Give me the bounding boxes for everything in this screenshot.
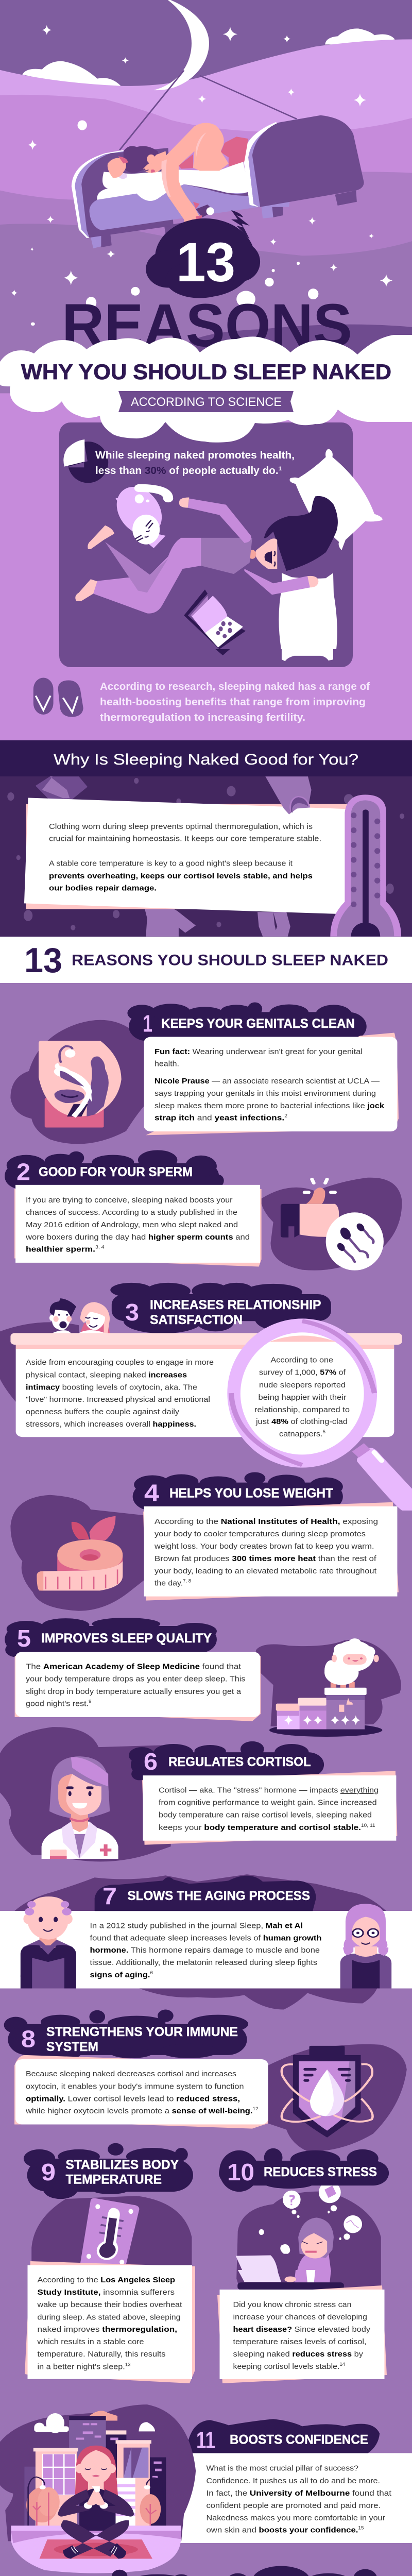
reason 8: strengthens your immune system: STRENGTHENS YOUR IMMUNE — [46, 2025, 238, 2039]
illustration: old man — [21, 1896, 76, 1977]
reason 5: improves sleep quality: The American Academy of Sleep Medicine found that — [26, 1663, 242, 1671]
text card — [142, 1771, 397, 1845]
note text: crucial for maintaining homeostasis. It keeps our core temperature stable. — [49, 835, 321, 843]
reason 8: strengthens your immune system: oxytocin, it enables your body's immune system to function — [26, 2082, 244, 2091]
pie chart icon — [63, 439, 108, 483]
illustration: doctor — [0, 1727, 171, 1861]
backing blob — [14, 1874, 386, 1911]
reason 1: keeps your genitals clean — [10, 1002, 399, 1144]
reason 10: reduces stress: sleeping naked reduces stress by — [233, 2350, 364, 2359]
reason 6: regulates cortisol: body temperature can raise cortisol levels, sleeping naked — [159, 1811, 372, 1820]
panel bottom: book tip and pillow — [215, 649, 333, 661]
title line: why you should sleep naked: WHY YOU SHOULD SLEEP NAKED — [21, 360, 391, 384]
title word: REASONS: REASONS — [62, 292, 352, 360]
reason 3: increases relationship satisfaction: stressors, which increases overall happiness. — [26, 1420, 196, 1429]
hanging bed illustration — [72, 71, 364, 248]
reason 7: slows the aging process: tissue. Additionally, the melatonin released during sleep fights — [90, 1958, 317, 1967]
reason 1: keeps your genitals clean: 2 — [284, 1113, 287, 1118]
note text: Clothing worn during sleep prevents optimal thermoregulation, which is — [49, 822, 313, 831]
note text — [49, 822, 321, 892]
heading: 13 reasons you should sleep naked — [0, 937, 412, 983]
text card — [25, 2261, 195, 2383]
reason 12: lets your skin breathe — [111, 2570, 187, 2576]
reason 6: regulates cortisol: 10, 11 — [361, 1823, 375, 1828]
text card — [14, 1185, 262, 1267]
reason 3: increases relationship satisfaction: catnappers. — [279, 1430, 319, 1438]
reason 5: improves sleep quality: 9 — [89, 1699, 92, 1704]
text card — [143, 1502, 399, 1601]
reason 10: reduces stress: 14 — [339, 2362, 345, 2367]
reason 5: improves sleep quality: your body temperature drops as you enter deep sleep. This — [26, 1675, 245, 1684]
note text: prevents overheating, keeps our cortisol levels stable, and helps — [49, 872, 313, 880]
note card — [24, 776, 349, 914]
note text: A stable core temperature is key to a good night's sleep because it — [49, 859, 293, 868]
reason 3: increases relationship satisfaction: Aside from encouraging couples to engage in more — [26, 1358, 214, 1367]
heading cloud — [227, 2566, 382, 2576]
reason 10: reduces stress: temperature raises levels of cortisol, — [233, 2337, 367, 2346]
number 13 on dark cloud — [146, 218, 260, 298]
reason 13: promotes healthy hair and skin — [218, 2566, 389, 2576]
reason 1: keeps your genitals clean: sleep makes them more prone to bacterial infections like jock — [154, 1101, 385, 1110]
reason 3: increases relationship satisfaction: "love" hormone. Increased physical and emotional — [26, 1395, 210, 1404]
reason 6: regulates cortisol: REGULATES CORTISOL — [168, 1755, 311, 1769]
reason 4: helps you lose weight: 4 — [144, 1480, 159, 1506]
heading band: why is sleeping naked good for you: Why Is Sleeping Naked Good for You? — [54, 751, 358, 768]
reason 4: helps you lose weight: weight loss. Your body creates brown fat to keep you warm. — [154, 1542, 374, 1551]
illustration: thermometer card — [31, 2196, 192, 2270]
reason 2: good for your sperm: 2 — [16, 1159, 30, 1185]
reason 7: slows the aging process — [0, 1874, 412, 2010]
reason 5: improves sleep quality: slight drop in body temperature actually ensures you get a — [26, 1687, 242, 1696]
reason 4: helps you lose weight: the day. — [154, 1579, 181, 1588]
text card — [14, 2055, 268, 2129]
reason 9: stabilizes body temperature: According to the Los Angeles Sleep — [37, 2276, 175, 2284]
reason 10: reduces stress: REDUCES STRESS — [264, 2165, 377, 2179]
reason 9: stabilizes body temperature: temperature. Naturally, this results — [37, 2350, 166, 2359]
icon: slippers — [33, 677, 84, 718]
reason 7: slows the aging process: signs of aging. — [90, 1971, 150, 1979]
reason 3: increases relationship satisfaction: According to one — [271, 1356, 333, 1365]
intro statistic text: 1 — [279, 466, 282, 472]
heading cloud — [133, 1472, 343, 1511]
reason 3: increases relationship satisfaction: intimacy boosting levels of oxytocin, aka. The — [26, 1383, 197, 1392]
reason 4: helps you lose weight: your body to cooler temperatures during sleep promotes — [154, 1530, 366, 1538]
reason 1: keeps your genitals clean: says trapping your genitals in this moist environment during — [154, 1089, 376, 1098]
text: In a 2012 study published in the journal Sleep, Mah et Al — [90, 1922, 303, 1930]
reason 5: improves sleep quality: good night's rest. — [26, 1699, 84, 1708]
reason 9: stabilizes body temperature: which results in a stable core — [37, 2337, 144, 2346]
reason 9: stabilizes body temperature: during sleep. As stated above, sleeping — [37, 2313, 180, 2321]
illustration: meditating woman and city — [0, 2404, 196, 2573]
intro statistic text — [95, 450, 295, 477]
text: What is the most crucial pillar of success? — [206, 2464, 358, 2473]
panel: clothing and thermoregulation — [0, 776, 412, 937]
reason 10: reduces stress: keeping cortisol levels stable. — [233, 2362, 334, 2371]
heading cloud — [4, 2010, 248, 2061]
reason 11: boosts confidence: confident people are promoted and paid more. — [206, 2501, 381, 2510]
magnifying glass callout — [227, 1318, 412, 1511]
reason 3: increases relationship satisfaction — [0, 1283, 412, 1511]
reason 11: boosts confidence: 11 — [196, 2427, 215, 2453]
reason 8: strengthens your immune system — [4, 2010, 407, 2151]
text card — [15, 1652, 261, 1721]
reason 8: strengthens your immune system: SYSTEM — [46, 2040, 98, 2054]
reason 1: keeps your genitals clean: strap itch and yeast infections. — [154, 1114, 275, 1122]
white band — [175, 2453, 412, 2543]
reason 3: increases relationship satisfaction: being happier with their — [259, 1393, 346, 1402]
illustration: pelvis — [10, 1020, 147, 1144]
reason 8: strengthens your immune system: 12 — [252, 2106, 258, 2111]
reason 9: stabilizes body temperature: naked improves thermoregulation, — [37, 2325, 177, 2334]
reason 3: increases relationship satisfaction: physical contact, sleeping naked increases — [26, 1370, 187, 1380]
illustration: old woman — [344, 1904, 387, 1947]
intro paragraph — [100, 681, 370, 723]
reason 2: good for your sperm: chances of success. According to a study published in the — [26, 1208, 237, 1217]
reason 11: boosts confidence — [0, 2404, 412, 2573]
heading cloud — [24, 2143, 193, 2199]
reason 2: good for your sperm — [5, 1150, 402, 1270]
heading cloud — [28, 2570, 191, 2576]
reason 3: increases relationship satisfaction: 5 — [323, 1429, 325, 1434]
reason 6: regulates cortisol: 6 — [144, 1748, 158, 1775]
white title cloud — [0, 335, 412, 443]
reason 10: reduces stress: 10 — [227, 2159, 254, 2185]
illustration: shield — [268, 2044, 407, 2151]
reason 1: keeps your genitals clean: health. — [154, 1060, 179, 1069]
reason 5: improves sleep quality: IMPROVES SLEEP QUALITY — [41, 1631, 212, 1646]
reason 6: regulates cortisol: from cognitive performance to weight gain. Since increased — [159, 1799, 377, 1807]
reason 8: strengthens your immune system: Because sleeping naked decreases cortisol and increases — [26, 2070, 236, 2078]
reason 6: regulates cortisol — [0, 1727, 397, 1861]
reason 3: increases relationship satisfaction: INCREASES RELATIONSHIP — [150, 1298, 321, 1312]
note text: our bodies repair damage. — [49, 884, 157, 892]
heading cloud — [219, 2148, 389, 2192]
illustration: sleeping woman in pajamas — [75, 449, 383, 649]
heading cloud — [5, 1150, 224, 1189]
reason 8: strengthens your immune system: 8 — [21, 2026, 36, 2053]
illustration: stressed woman at laptop — [236, 2181, 381, 2312]
reason 4: helps you lose weight: HELPS YOU LOSE WEIGHT — [169, 1486, 333, 1500]
reason 6: regulates cortisol: keeps your body temperature and cortisol stable. — [159, 1823, 342, 1832]
heading cloud — [110, 1283, 331, 1333]
stars and dots — [11, 25, 392, 326]
heading cloud — [5, 1618, 217, 1657]
reason 2: good for your sperm: If you are trying to conceive, sleeping naked boosts your — [26, 1196, 233, 1205]
banner: according to science: ACCORDING TO SCIENCE — [131, 395, 282, 409]
reason 2: good for your sperm: May 2016 edition of Andrology, men who slept naked and — [26, 1221, 238, 1229]
reason 11: boosts confidence: Nakedness makes you more comfortable in your — [206, 2514, 385, 2522]
reason 9: stabilizes body temperature: 9 — [41, 2159, 56, 2185]
reason 3: increases relationship satisfaction: relationship, compared to — [254, 1405, 350, 1414]
reason 7: slows the aging process: SLOWS THE AGING PROCESS — [128, 1889, 310, 1903]
reason 6: regulates cortisol: Cortisol — aka. The "stress" hormone — impacts everything — [159, 1786, 379, 1795]
text card — [217, 2285, 387, 2383]
intro paragraph: health-boosting benefits that range from improving — [100, 697, 366, 708]
heading cloud — [186, 2419, 380, 2453]
reason 1: keeps your genitals clean: 1 — [143, 1010, 152, 1037]
reason 2: good for your sperm: GOOD FOR YOUR SPERM — [39, 1165, 193, 1179]
reason 7: slows the aging process: 6 — [150, 1970, 153, 1975]
reason 3: increases relationship satisfaction: openness buffers the couple against daily — [26, 1408, 180, 1416]
heading cloud — [129, 1741, 324, 1780]
white band — [0, 1911, 412, 1989]
reason 7: slows the aging process: 7 — [102, 1883, 117, 1909]
reason 2: good for your sperm: 3, 4 — [95, 1245, 104, 1250]
heading: 13 reasons you should sleep naked: REASONS YOU SHOULD SLEEP NAKED — [72, 952, 388, 969]
reason 1: keeps your genitals clean: KEEPS YOUR GENITALS CLEAN — [161, 1016, 355, 1031]
reason 4: helps you lose weight: your body, leading to an elevated metabolic rate throughout — [154, 1567, 377, 1575]
intro statistic text: While sleeping naked promotes health, — [95, 450, 295, 461]
reason 4: helps you lose weight — [10, 1472, 399, 1611]
reason 3: increases relationship satisfaction: survey of 1,000, 57% of — [259, 1368, 346, 1377]
reason 2: good for your sperm: healthier sperm. — [26, 1245, 95, 1254]
reason 9: stabilizes body temperature: TEMPERATURE — [66, 2172, 162, 2187]
intro statistic text: less than 30% of people actually do. — [95, 465, 274, 477]
reason 3: increases relationship satisfaction: 3 — [125, 1299, 139, 1326]
heading cloud — [127, 1002, 367, 1041]
main illustration panel — [59, 422, 353, 667]
reason 3: increases relationship satisfaction: nude sleepers reported — [259, 1381, 346, 1389]
banner: according to science — [118, 391, 294, 412]
reason 10: reduces stress: increase your chances of developing — [233, 2313, 367, 2321]
reason 9: stabilizes body temperature: in a better night's sleep. — [37, 2362, 118, 2371]
reason 9: stabilizes body temperature: 13 — [125, 2362, 130, 2367]
heading: 13 reasons you should sleep naked: 13 — [24, 941, 62, 980]
reason 4: helps you lose weight: Brown fat produces 300 times more heat than the rest of — [154, 1554, 377, 1563]
moon — [153, 0, 209, 90]
reason 5: improves sleep quality — [5, 1618, 401, 1737]
illustration: measuring tape — [10, 1495, 147, 1611]
reason 4: helps you lose weight: According to the National Institutes of Health, exposing — [154, 1517, 378, 1526]
bed-shaped text card — [10, 1333, 402, 1437]
thermometer — [330, 794, 401, 937]
hero background — [0, 0, 412, 741]
reason 11: boosts confidence: Confidence. It pushes us all to do and be more. — [206, 2477, 380, 2485]
reason 11: boosts confidence: own skin and boosts your confidence. — [206, 2526, 348, 2534]
text card — [144, 1033, 399, 1135]
reason 9: stabilizes body temperature — [24, 2143, 195, 2383]
reason 7: slows the aging process: found that adequate sleep increases levels of human growth — [90, 1934, 321, 1943]
reason 5: improves sleep quality: 5 — [17, 1625, 31, 1652]
illustration: sheep on podium — [255, 1638, 401, 1737]
heading band: why is sleeping naked good for you — [0, 740, 412, 776]
illustration: thumbs up and sperm — [260, 1177, 402, 1270]
reasons background — [0, 983, 412, 2576]
reason 11: boosts confidence: BOOSTS CONFIDENCE — [230, 2433, 368, 2447]
reason 9: stabilizes body temperature: wake up because their bodies overheat — [37, 2300, 182, 2309]
reason 2: good for your sperm: wore boxers during the day had higher sperm counts and — [25, 1233, 250, 1242]
number 13 on dark cloud: 13 — [176, 231, 235, 293]
reason 4: helps you lose weight: 7, 8 — [183, 1579, 191, 1584]
reason 3: increases relationship satisfaction: just 48% of clothing-clad — [255, 1417, 348, 1426]
illustration: couple in bed — [0, 1298, 110, 1402]
reason 9: stabilizes body temperature: STABILIZES BODY — [66, 2158, 179, 2172]
intro paragraph: thermoregulation to increasing fertility. — [100, 712, 305, 723]
reason 1: keeps your genitals clean: Fun fact: Wearing underwear isn't great for your genital — [154, 1047, 363, 1056]
heading cloud — [95, 1876, 316, 1911]
intro paragraph: According to research, sleeping naked has a range of — [100, 681, 370, 692]
reason 3: increases relationship satisfaction: SATISFACTION — [150, 1313, 243, 1327]
reason 9: stabilizes body temperature: Study Institute, insomnia sufferers — [37, 2288, 175, 2297]
reason 8: strengthens your immune system: while higher oxytocin levels promote a sense of well-being. — [26, 2107, 245, 2115]
reason 7: slows the aging process: hormone. This hormone repairs damage to muscle and bone — [90, 1946, 320, 1955]
reason 10: reduces stress: Did you know chronic stress can — [233, 2300, 351, 2309]
reason 1: keeps your genitals clean: Nicole Prause — an associate research scientist at UCLA — — [154, 1077, 380, 1086]
reason 11: boosts confidence: 15 — [358, 2525, 364, 2530]
reason 10: reduces stress — [217, 2148, 389, 2383]
reason 11: boosts confidence: In fact, the University of Melbourne found that — [206, 2489, 392, 2498]
reason 10: reduces stress: heart disease? Since elevated body — [233, 2325, 371, 2334]
reason 8: strengthens your immune system: optimally. Lower cortisol levels lead to reduced stress, — [26, 2095, 240, 2103]
